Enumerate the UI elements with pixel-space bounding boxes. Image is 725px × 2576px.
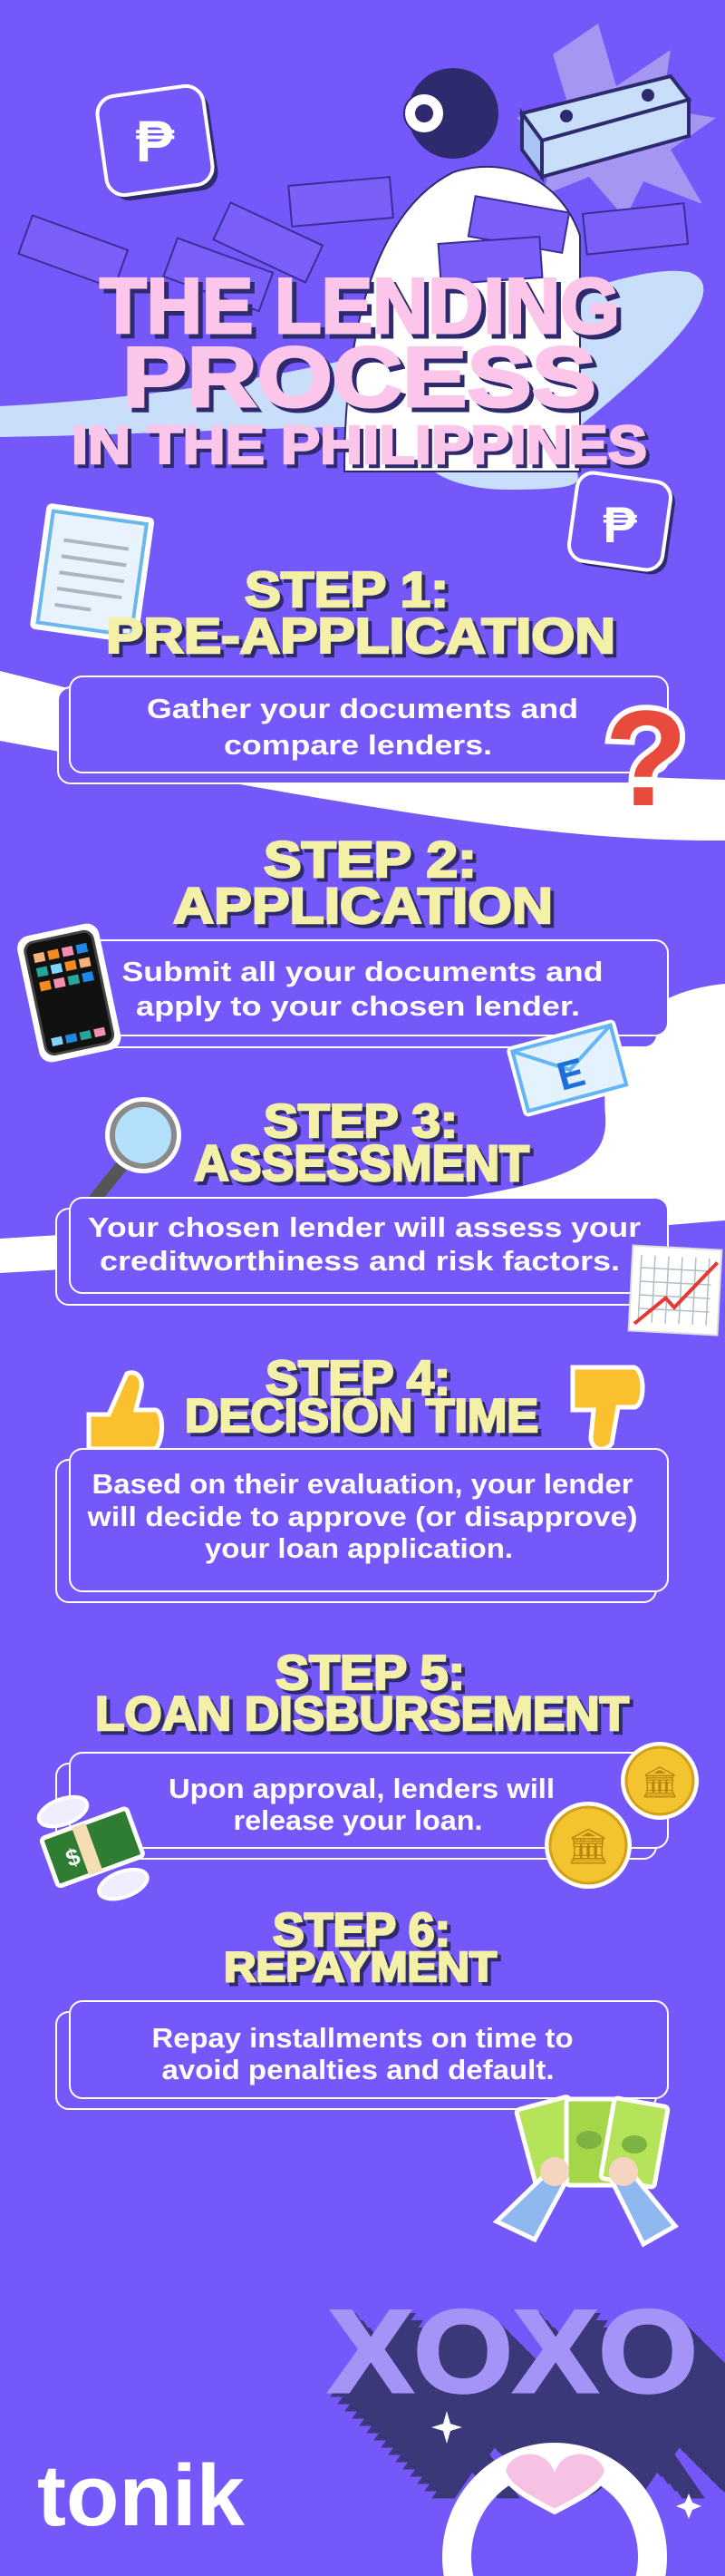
panel: step 6 box <box>56 2001 668 2109</box>
step 1 heading: STEP 1: <box>248 565 452 621</box>
XOXO extruded text: XOXO <box>339 2296 709 2428</box>
step 5 heading: STEP 5: <box>276 1646 465 1700</box>
icon: question mark: ? <box>604 682 688 834</box>
step 5 heading <box>95 1646 633 1745</box>
step 3 heading: STEP 3: <box>264 1095 458 1148</box>
step 3 heading: ASSESSMENT <box>198 1138 533 1195</box>
heart hands ring <box>457 2452 652 2576</box>
panel: step 3 box: creditworthiness and risk factors. <box>100 1245 620 1277</box>
title: PROCESS <box>127 334 601 429</box>
icon: thumbs up <box>89 1373 162 1449</box>
step 4 heading: DECISION TIME <box>188 1394 542 1446</box>
panel: step 5 box: Upon approval, lenders will <box>169 1773 555 1804</box>
icon: gold coins: 🏛 <box>566 1826 610 1866</box>
money stack <box>522 76 689 177</box>
panel: step 1 box: Gather your documents and <box>147 693 578 724</box>
icon: document <box>30 503 155 644</box>
XOXO extruded text <box>328 2285 725 2523</box>
icon: email envelope: E <box>553 1050 590 1100</box>
step 6 heading <box>224 1904 500 1994</box>
background white ribbon <box>0 671 725 1273</box>
icon: chart <box>629 1246 721 1336</box>
step 3 heading: STEP 3: <box>267 1099 461 1152</box>
step 5 heading: STEP 5: <box>279 1649 469 1704</box>
step 5 heading: LOAN DISBURSEMENT <box>95 1687 629 1741</box>
title: IN THE PHILIPPINES <box>75 419 651 479</box>
icon: gold coins <box>545 1742 699 1889</box>
XOXO extruded text: XOXO <box>390 2347 725 2479</box>
XOXO extruded text: XOXO <box>353 2310 723 2443</box>
step 4 heading <box>185 1351 542 1446</box>
icon: gold coins: 🏛 <box>640 1764 680 1801</box>
step 4 heading: STEP 4: <box>266 1351 450 1405</box>
step 5 heading: LOAN DISBURSEMENT <box>99 1691 633 1745</box>
panel: step 2 box: apply to your chosen lender. <box>136 990 580 1022</box>
icon: thumbs down <box>573 1367 643 1449</box>
XOXO extruded text: XOXO <box>382 2339 725 2472</box>
panel: step 1 box: compare lenders. <box>224 729 492 761</box>
XOXO extruded text: XOXO <box>346 2303 716 2435</box>
icon: money with wings: $ <box>62 1842 84 1872</box>
step 1 heading: STEP 1: <box>245 561 449 617</box>
title: IN THE PHILIPPINES <box>72 415 647 475</box>
icon: money with wings <box>31 1779 155 1918</box>
step 4 heading: DECISION TIME <box>185 1390 538 1443</box>
scattered bills <box>18 177 688 311</box>
step 6 heading: STEP 6: <box>276 1908 454 1960</box>
coin: peso left: ₱ <box>136 109 175 174</box>
XOXO extruded text: XOXO <box>328 2285 698 2417</box>
coin: peso right <box>567 471 677 577</box>
icon: email envelope <box>506 1018 633 1118</box>
panel: step 2 box <box>58 940 668 1047</box>
logo: tonik: tonik <box>37 2447 246 2544</box>
icon: phone <box>14 921 123 1064</box>
step 2 heading <box>173 831 556 938</box>
XOXO extruded text: XOXO <box>375 2332 725 2464</box>
icon: magnifier <box>95 1097 181 1199</box>
title <box>72 263 651 479</box>
light blue swoosh <box>0 271 703 490</box>
step 6 heading: REPAYMENT <box>224 1943 497 1990</box>
panel: step 4 box: will decide to approve (or disapprove) <box>86 1501 637 1532</box>
panel: step 3 box <box>56 1198 668 1305</box>
step 2 heading: APPLICATION <box>173 877 553 934</box>
step 2 heading: APPLICATION <box>177 880 556 938</box>
title: PROCESS <box>122 329 596 424</box>
XOXO extruded text: XOXO <box>368 2325 725 2457</box>
step 3 heading: ASSESSMENT <box>194 1134 529 1191</box>
step 1 heading <box>106 561 619 667</box>
panel: step 6 box: avoid penalties and default. <box>161 2054 555 2085</box>
icon: question mark: ? <box>604 682 688 834</box>
XOXO extruded text: XOXO <box>361 2318 725 2450</box>
XOXO extruded text: XOXO <box>332 2289 701 2421</box>
panel: step 3 box: Your chosen lender will assess your <box>88 1211 641 1243</box>
step 6 heading: REPAYMENT <box>227 1947 500 1994</box>
step 4 heading: STEP 4: <box>269 1355 454 1409</box>
step 1 heading: PRE-APPLICATION <box>106 608 615 664</box>
person illustration <box>344 68 580 471</box>
panel: step 4 box: Based on their evaluation, your lender <box>92 1468 633 1500</box>
coin: peso right: ₱ <box>603 496 637 553</box>
title: THE LENDING <box>100 263 620 350</box>
starburst <box>517 24 716 219</box>
panel: step 4 box: your loan application. <box>205 1532 513 1564</box>
step 1 heading: PRE-APPLICATION <box>110 611 619 667</box>
step 3 heading <box>194 1095 533 1195</box>
panel: step 1 box <box>58 676 668 783</box>
panel: step 5 box <box>56 1753 668 1859</box>
sparkle <box>431 2411 701 2519</box>
coin: peso left <box>95 83 220 203</box>
panel: step 4 box <box>56 1449 668 1602</box>
step 2 heading: STEP 2: <box>267 834 480 891</box>
panel: step 2 box: Submit all your documents and <box>121 956 604 987</box>
step 2 heading: STEP 2: <box>264 831 477 888</box>
panel: step 5 box: release your loan. <box>234 1804 482 1836</box>
panel: step 6 box: Repay installments on time to <box>152 2022 573 2054</box>
icon: hands holding money <box>497 2096 675 2244</box>
step 6 heading: STEP 6: <box>273 1904 450 1957</box>
title: THE LENDING <box>104 267 624 355</box>
